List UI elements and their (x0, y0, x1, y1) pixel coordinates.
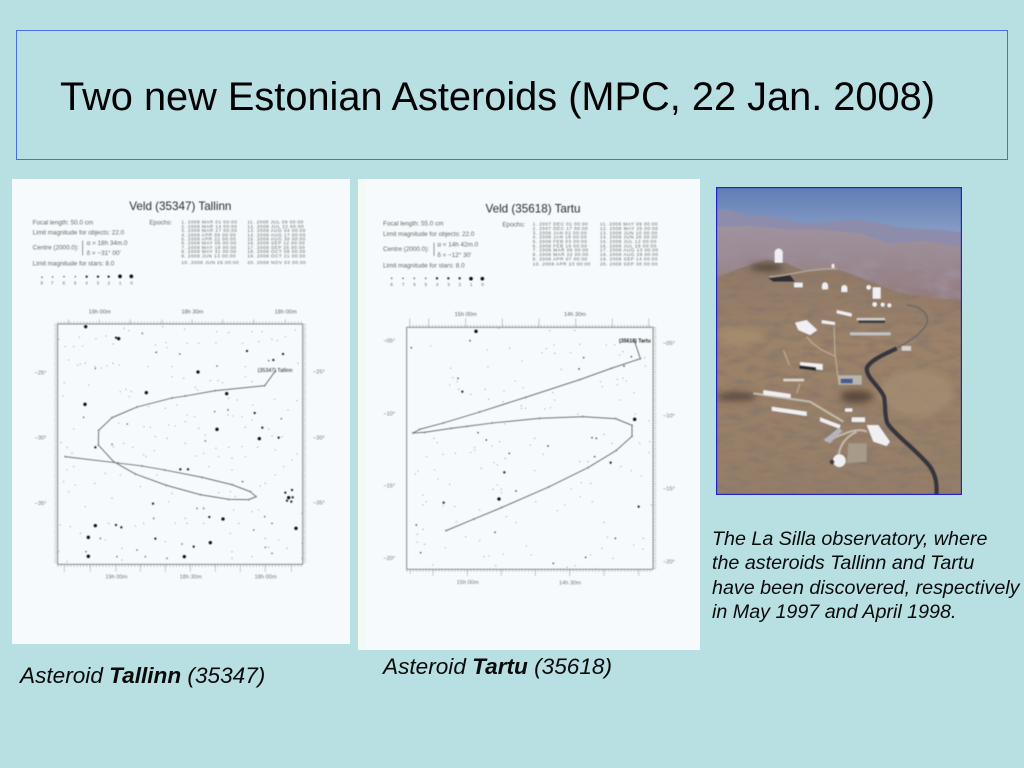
title: Two new Estonian Asteroids (MPC, 22 Jan. 2008) (60, 75, 935, 119)
axis labels: −35° (35, 501, 47, 507)
asteroid track: Tartu (413, 342, 640, 531)
chart header: Tallinn: Centre (2000.0): (33, 245, 79, 252)
chart header: Tallinn: 18h 30m (181, 309, 204, 315)
chart header: Tartu: 11. 2008 MAY 09 00:00 (600, 222, 658, 227)
caption: La Silla observatory: the asteroids Tallinn and Tartu (712, 552, 974, 574)
axis labels: −20° (663, 559, 675, 565)
chart header: Tallinn: 15. 2008 AUG 30 00:00 (247, 237, 306, 242)
chart header: Tallinn: 6. 2008 MAY 05 00:00 (181, 241, 237, 246)
axis labels (35, 370, 325, 580)
axis labels: 15h 00m (457, 580, 479, 586)
chart header: Tartu: 5. 2008 FEB 03 00:00 (533, 239, 587, 244)
chart header: Tallinn: 14. 2008 AUG 17 00:00 (247, 232, 306, 237)
chart header: Tartu: 2. 2007 DEC 17 00:00 (533, 226, 588, 231)
caption: Asteroid Tallinn: Asteroid Tallinn (35347) (20, 663, 265, 688)
chart header: Tallinn: 5. 2008 APR 22 00:00 (181, 237, 236, 242)
chart header: Tartu: 2 (459, 282, 462, 287)
chart header: Tartu: 10. 2008 APR 23 00:00 (533, 261, 591, 266)
chart header: Tallinn: 0 (130, 281, 133, 286)
chart header: Tartu: Limit magnitude for objects: 22.0 (383, 231, 475, 238)
axis labels: −30° (35, 436, 47, 442)
chart header: Tartu: 15h 00m (455, 312, 477, 318)
chart header: Tartu: Limit magnitude for stars: 8.0 (383, 262, 465, 269)
chart header: Tartu: Centre (2000.0): (383, 246, 429, 253)
chart header: Tallinn: 12. 2008 JUL 22 00:00 (247, 224, 304, 229)
chart header: Tallinn: 2 (108, 281, 111, 286)
chart header: Tartu (383, 202, 658, 318)
chart header: Tallinn: Limit magnitude for objects: 22.0 (33, 230, 125, 237)
chart header: Tallinn: 5 (74, 281, 77, 286)
chart header: Tallinn: 19. 2008 OCT 21 00:00 (247, 253, 306, 258)
chart header: Tartu: 4. 2008 JAN 18 00:00 (533, 235, 587, 240)
axis labels: −25° (313, 370, 325, 376)
axis labels: 19h 00m (105, 574, 128, 580)
chart header: Tartu: Epochs: (502, 221, 525, 228)
chart header: Tartu: Veld (35618) Tartu (485, 202, 581, 215)
chart header: Tallinn: 18h 00m (275, 309, 297, 315)
asteroid track: Tallinn (65, 371, 275, 500)
observatory buildings (763, 249, 911, 467)
far mountains (717, 210, 961, 247)
bright stars (411, 331, 639, 563)
axis labels: −15° (383, 484, 395, 490)
chart header: Tallinn: 10. 2008 JUN 26 00:00 (181, 260, 239, 265)
caption: La Silla observatory: have been discovered, respectively (712, 577, 1020, 599)
axis labels: 18h 00m (255, 574, 277, 580)
road (753, 268, 937, 495)
axis labels: −05° (383, 338, 395, 344)
star chart: Tallinn (35, 319, 325, 580)
chart header: Tartu: 20. 2008 SEP 30 00:00 (600, 261, 658, 266)
chart header: Tartu: 1. 2007 DEC 01 00:00 (533, 222, 588, 227)
chart header: Tallinn: 3. 2008 MAR 27 00:00 (181, 228, 237, 233)
chart header: Tartu: 18. 2008 AUG 29 00:00 (600, 252, 658, 257)
chart header: Tallinn: 4. 2008 APR 09 00:00 (181, 232, 236, 237)
chart header: Tartu: 3. 2008 JAN 02 00:00 (533, 230, 587, 235)
chart header: Tallinn: 8. 2008 MAY 31 00:00 (181, 249, 237, 254)
chart header: Tallinn: Limit magnitude for stars: 8.0 (33, 261, 115, 268)
panel: Tallinn finder chart (12, 179, 350, 644)
chart header: Tallinn: 1. 2008 MAR 01 00:00 (181, 220, 237, 225)
title box (16, 30, 1008, 160)
chart header: Tallinn: Focal length: 50.0 cm (33, 220, 93, 227)
chart header: Tallinn: 11. 2008 JUL 09 00:00 (247, 220, 304, 225)
photo: La Silla observatory (716, 187, 962, 495)
chart header: Tartu: 6. 2008 FEB 19 00:00 (533, 243, 587, 248)
panel: Tartu finder chart (358, 179, 700, 650)
chart header: Tartu: 15. 2008 JUL 12 00:00 (600, 239, 657, 244)
chart header: Tallinn: 6 (63, 281, 66, 286)
star chart: Tartu (383, 318, 675, 587)
chart header: Tartu: 0 (481, 282, 484, 287)
chart header: Tallinn: Veld (35347) Tallinn (129, 200, 231, 213)
chart header: Tartu: 16. 2008 JUL 28 00:00 (600, 243, 657, 248)
axis labels: −35° (313, 501, 325, 507)
chart header: Tartu: 1 (470, 282, 473, 287)
chart header: Tallinn: 8 (41, 281, 44, 286)
axis labels: 14h 30m (559, 581, 581, 587)
chart header: Tallinn (33, 200, 306, 315)
axis labels: −20° (383, 556, 395, 562)
chart header: Tartu: 7 (402, 282, 405, 287)
chart header: Tallinn: 1 (119, 281, 122, 286)
chart header: Tallinn: 7. 2008 MAY 18 00:00 (181, 245, 237, 250)
chart header: Tallinn: 13. 2008 AUG 04 00:00 (247, 228, 306, 233)
caption: Asteroid Tartu: Asteroid Tartu (35618) (383, 654, 612, 679)
track label: Tartu: (35618) Tartu (619, 339, 651, 345)
caption: La Silla observatory: in May 1997 and April 1998. (712, 601, 956, 623)
caption: La Silla observatory: The La Silla observatory, where (712, 528, 987, 550)
chart header: Tartu: 8 (390, 282, 393, 287)
chart header: Tartu: 12. 2008 MAY 25 00:00 (600, 226, 658, 231)
chart header: Tartu: 3 (447, 282, 450, 287)
chart header: Tallinn: 16. 2008 SEP 12 00:00 (247, 241, 305, 246)
chart header: Tartu: 14. 2008 JUN 26 00:00 (600, 235, 658, 240)
axis labels: −25° (35, 370, 47, 376)
chart header: Tallinn: δ = −31° 00′ (87, 249, 121, 257)
chart frame (407, 318, 655, 576)
chart header: Tallinn: 18. 2008 OCT 08 00:00 (247, 249, 306, 254)
bright stars (84, 327, 296, 558)
chart frame (56, 319, 304, 572)
sky (717, 188, 961, 233)
chart header: Tallinn: 20. 2008 NOV 03 00:00 (247, 260, 306, 265)
chart header: Tartu: 17. 2008 AUG 13 00:00 (600, 248, 658, 253)
chart header: Tartu: 4 (436, 282, 439, 287)
axis labels: −30° (313, 435, 325, 441)
axis labels: −10° (383, 411, 395, 417)
chart header: Tartu: δ = −12° 30′ (437, 251, 472, 259)
chart header: Tallinn: 19h 00m (89, 309, 111, 315)
hill ridge (716, 260, 962, 495)
chart header: Tallinn: 4 (85, 281, 88, 286)
axis labels (383, 338, 675, 587)
chart header: Tartu: 5 (425, 282, 428, 287)
axis labels: −10° (663, 414, 675, 420)
chart header: Tartu: 9. 2008 APR 07 00:00 (533, 256, 588, 261)
chart header: Tartu: α = 14h 42m.0 (437, 241, 479, 248)
chart header: Tallinn: α = 18h 34m.0 (87, 240, 128, 247)
chart header: Tallinn: 2. 2008 MAR 14 00:00 (181, 224, 237, 229)
chart header: Tartu: 14h 30m (564, 312, 586, 318)
chart header: Tallinn: Epochs: (149, 220, 172, 227)
chart header: Tartu: Focal length: 55.0 cm (383, 220, 444, 227)
chart header: Tartu: 6 (413, 282, 416, 287)
chart header: Tartu: 13. 2008 JUN 10 00:00 (600, 230, 658, 235)
chart header: Tallinn: 7 (51, 281, 54, 286)
chart header: Tartu: 19. 2008 SEP 14 00:00 (600, 256, 658, 261)
chart header: Tartu: 7. 2008 MAR 06 00:00 (533, 248, 589, 253)
axis labels: −15° (663, 486, 675, 492)
axis labels: −05° (663, 341, 675, 347)
near mountains (716, 226, 962, 303)
chart header: Tallinn: 17. 2008 SEP 25 00:00 (247, 245, 305, 250)
chart header: Tallinn: 3 (97, 281, 100, 286)
chart header: Tallinn: 9. 2008 JUN 13 00:00 (181, 253, 236, 258)
caption: La Silla observatory (712, 528, 1020, 623)
axis labels: 18h 30m (180, 574, 202, 580)
faint field stars (415, 328, 651, 569)
track label: Tallinn: (35347) Tallinn (258, 368, 293, 374)
chart header: Tartu: 8. 2008 MAR 22 00:00 (533, 252, 589, 257)
faint field stars (59, 327, 302, 562)
